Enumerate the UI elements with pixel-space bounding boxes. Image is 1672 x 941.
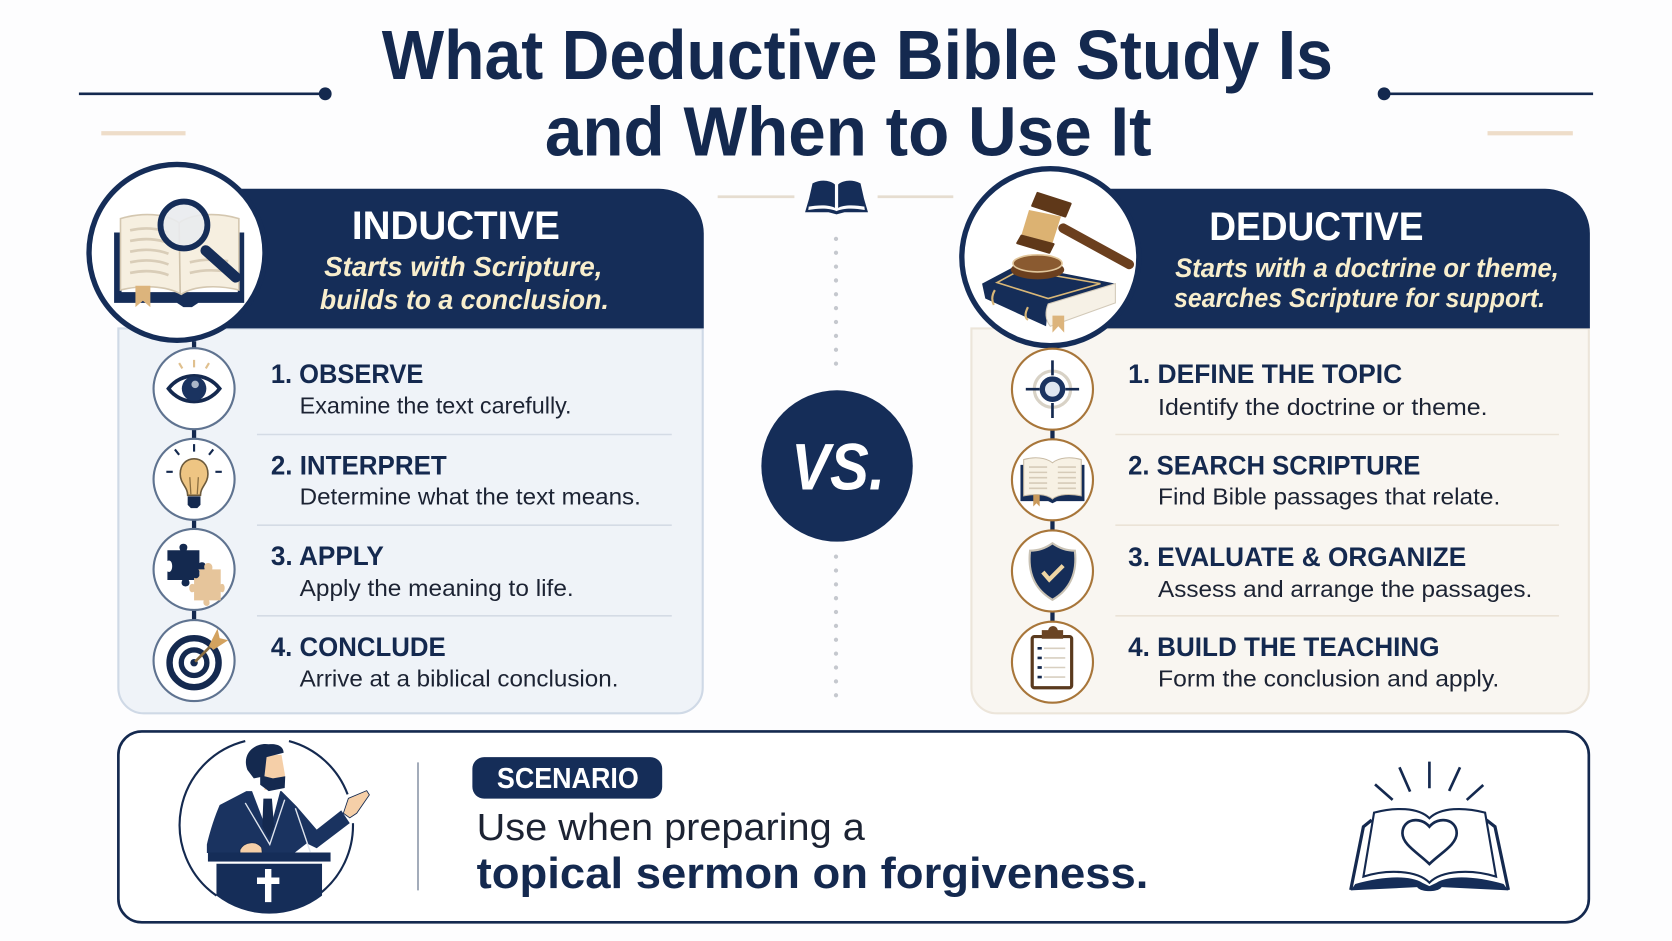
step text: 4. BUILD THE TEACHING (1128, 632, 1440, 662)
scenario pill (472, 757, 662, 799)
icon: open Bible (1012, 439, 1093, 520)
icon: puzzle pieces (154, 529, 235, 610)
dotted centre line (834, 239, 838, 706)
deductive subtitle: Starts with a doctrine or theme, (1175, 253, 1559, 283)
vertical divider (417, 762, 419, 890)
step text: 1. DEFINE THE TOPIC (1128, 359, 1402, 389)
step 4: conclude: Arrive at a biblical conclusion. (300, 666, 618, 692)
step 3: evaluate and organize: Assess and arrange the passages. (1158, 576, 1532, 602)
illustration: preacher at pulpit (180, 741, 369, 914)
step 3: evaluate and organize (1012, 530, 1532, 612)
step 1: define the topic: Identify the doctrine or theme. (1158, 394, 1488, 420)
separators (1115, 435, 1559, 616)
icon: gavel on Bible (962, 169, 1139, 346)
inductive header band (213, 189, 704, 328)
icon: open book with heart and rays (1351, 762, 1508, 891)
inductive body (118, 328, 703, 713)
step text: 4. CONCLUDE (271, 632, 446, 662)
inductive subtitle: Starts with Scripture, (324, 251, 602, 282)
deductive header band (1088, 189, 1590, 328)
panel: scenario: topical sermon on forgiveness. (477, 849, 1148, 898)
inductive heading: INDUCTIVE (352, 204, 560, 248)
title: What Deductive Bible Study Is (382, 16, 1333, 94)
title: and When to Use It (545, 93, 1152, 171)
panel: deductive (962, 169, 1590, 713)
step 3: apply: Apply the meaning to life. (300, 575, 574, 601)
step 1: observe: Examine the text carefully. (300, 393, 572, 419)
icon: crosshair (1012, 349, 1093, 430)
title rule left (79, 87, 332, 133)
inductive subtitle: builds to a conclusion. (320, 284, 609, 315)
step 2: search scripture: Find Bible passages that relate. (1158, 483, 1500, 509)
icon: light bulb (154, 439, 235, 520)
step 4: build the teaching: Form the conclusion and apply. (1158, 666, 1499, 692)
icon: open book with magnifier (89, 164, 265, 340)
connector line (192, 341, 196, 640)
deductive subtitle: searches Scripture for support. (1174, 283, 1545, 313)
icon: small open book (805, 181, 868, 214)
step 4: build the teaching (1012, 622, 1499, 703)
icon: target with arrow (154, 620, 235, 701)
connector line (1050, 341, 1054, 640)
inductive subtitle (320, 251, 609, 315)
icon: clipboard (1012, 622, 1093, 703)
panel: scenario (118, 731, 1589, 922)
step 3: apply (154, 529, 574, 610)
step text: 3. EVALUATE & ORGANIZE (1128, 542, 1466, 572)
VS badge: VS. (791, 430, 885, 504)
step 1: observe (154, 348, 572, 429)
scenario text: Use when preparing a (477, 806, 865, 849)
icon: shield with check (1012, 530, 1093, 612)
step 2: interpret: Determine what the text means. (300, 483, 641, 509)
scenario pill: SCENARIO (497, 763, 639, 795)
VS badge (761, 390, 913, 542)
icon: eye (154, 348, 235, 429)
step 2: interpret (154, 439, 641, 520)
panel: inductive (89, 164, 704, 713)
step 1: define the topic (1012, 349, 1488, 430)
title rule right (1378, 87, 1593, 133)
step text: 2. INTERPRET (271, 450, 447, 480)
divider lines and book icon (718, 181, 953, 214)
step 4: conclude (154, 620, 618, 701)
step text: 1. OBSERVE (271, 359, 423, 389)
step text: 2. SEARCH SCRIPTURE (1128, 450, 1420, 480)
title (382, 16, 1333, 171)
deductive body (971, 328, 1589, 713)
step 2: search scripture (1012, 439, 1500, 520)
deductive subtitle (1174, 253, 1559, 313)
separators (257, 435, 672, 616)
step text: 3. APPLY (271, 541, 384, 571)
deductive heading: DEDUCTIVE (1209, 205, 1424, 249)
